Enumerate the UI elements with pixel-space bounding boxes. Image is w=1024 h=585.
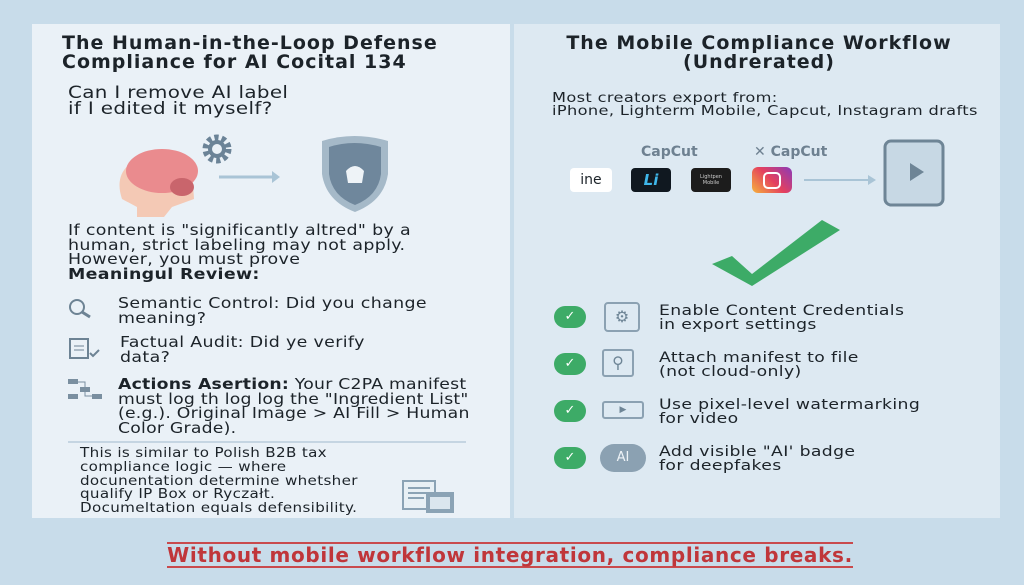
app: Li — [631, 168, 671, 192]
capcut labels: CapCut — [641, 144, 698, 160]
note: polish tax comparison: compliance logic — where — [80, 459, 286, 475]
right title: The Mobile Compliance Workflow — [566, 32, 952, 54]
icon: phone — [884, 140, 944, 206]
step 2 — [554, 349, 859, 380]
left title: The Human-in-the-Loop Defense — [62, 32, 438, 54]
item: semantic control: Semantic Control: Did you change — [118, 294, 427, 312]
question: Can I remove AI label — [68, 83, 288, 103]
app icons row: ✕ CapCut — [754, 144, 827, 160]
step 4: for deepfakes — [659, 458, 782, 474]
note: polish tax comparison: qualify IP Box or Ryczałt. — [80, 486, 275, 502]
step 3: ✓ — [565, 403, 575, 418]
item: factual audit: Factual Audit: Did ye verify — [120, 333, 365, 351]
intro paragraph: human, strict labeling may not apply. — [68, 236, 405, 254]
note: polish tax comparison — [80, 445, 358, 516]
step 3: ▶ — [620, 405, 626, 415]
step 4: Add visible "AI' badge — [659, 444, 855, 460]
step 2: (not cloud-only) — [659, 364, 802, 380]
icon: clipboard — [69, 338, 100, 359]
arrow — [804, 175, 876, 185]
right title — [566, 32, 952, 73]
intro paragraph: If content is "significantly altred" by a — [68, 221, 411, 239]
app: lightpen: Mobile — [703, 180, 719, 186]
step 2: ⚲ — [612, 353, 624, 372]
intro text: iPhone, Lighterm Mobile, Capcut, Instagram drafts — [552, 103, 978, 119]
icon: magnifier — [69, 299, 91, 318]
note: polish tax comparison: docunentation determine whetsher — [80, 473, 358, 489]
item: actions assertion: (e.g.). Original Image > AI Fill > Human — [118, 404, 470, 422]
step 1: in export settings — [659, 316, 817, 332]
item: factual audit — [69, 333, 365, 366]
app: instagram — [752, 167, 792, 193]
item: actions assertion: Color Grade). — [118, 418, 236, 436]
item: actions assertion: Actions Asertion: Your C2PA manifest — [118, 375, 466, 393]
app: lightpen — [691, 168, 731, 192]
left title — [62, 32, 438, 73]
step 4 — [554, 444, 855, 474]
step 1: Enable Content Credentials — [659, 303, 904, 319]
bottom banner: Without mobile workflow integration, compliance breaks. — [167, 543, 853, 567]
item: semantic control: meaning? — [118, 308, 206, 326]
step 2: Attach manifest to file — [659, 350, 859, 366]
step 3: Use pixel-level watermarking — [659, 397, 920, 413]
icon: document calculator — [402, 480, 454, 513]
intro text: Most creators export from: — [552, 90, 778, 106]
item: factual audit: data? — [120, 348, 170, 366]
question: if I edited it myself? — [68, 99, 273, 119]
icon: flow diagram — [68, 379, 102, 399]
right title: (Undrerated) — [683, 51, 835, 73]
question — [68, 83, 288, 119]
panel: mobile workflow — [514, 24, 1000, 518]
app: lightpen: Lightpen — [700, 174, 722, 180]
step 2: ✓ — [565, 356, 575, 371]
left title: Compliance for AI Cocital 134 — [62, 51, 407, 73]
item: actions assertion — [68, 375, 470, 436]
intro paragraph: However, you must prove — [68, 250, 300, 268]
step 4: ✓ — [565, 450, 575, 465]
note: polish tax comparison: Documeltation equals defensibility. — [80, 500, 357, 516]
app: Li: Li — [644, 171, 658, 189]
app: ine — [570, 168, 612, 192]
intro text — [552, 90, 978, 119]
step 1: ⚙ — [615, 307, 629, 326]
step 1 — [554, 302, 904, 332]
app icons row — [570, 144, 876, 193]
intro paragraph: Meaningul Review: — [68, 264, 260, 282]
step 1: ✓ — [565, 309, 575, 324]
note: polish tax comparison: This is similar to Polish B2B tax — [80, 445, 327, 461]
step 3 — [554, 397, 920, 426]
checklist — [554, 302, 920, 474]
item: semantic control — [69, 294, 427, 326]
step 4: AI — [617, 450, 629, 465]
panel: human-in-the-loop — [32, 24, 510, 518]
app: ine: ine — [580, 172, 602, 188]
icon: brain head gear arrow shield — [120, 134, 388, 217]
big check mark — [712, 220, 840, 286]
step 3: for video — [659, 410, 739, 426]
intro paragraph — [68, 221, 411, 282]
item: actions assertion: must log th log log the "Ingredient List" — [118, 390, 469, 408]
